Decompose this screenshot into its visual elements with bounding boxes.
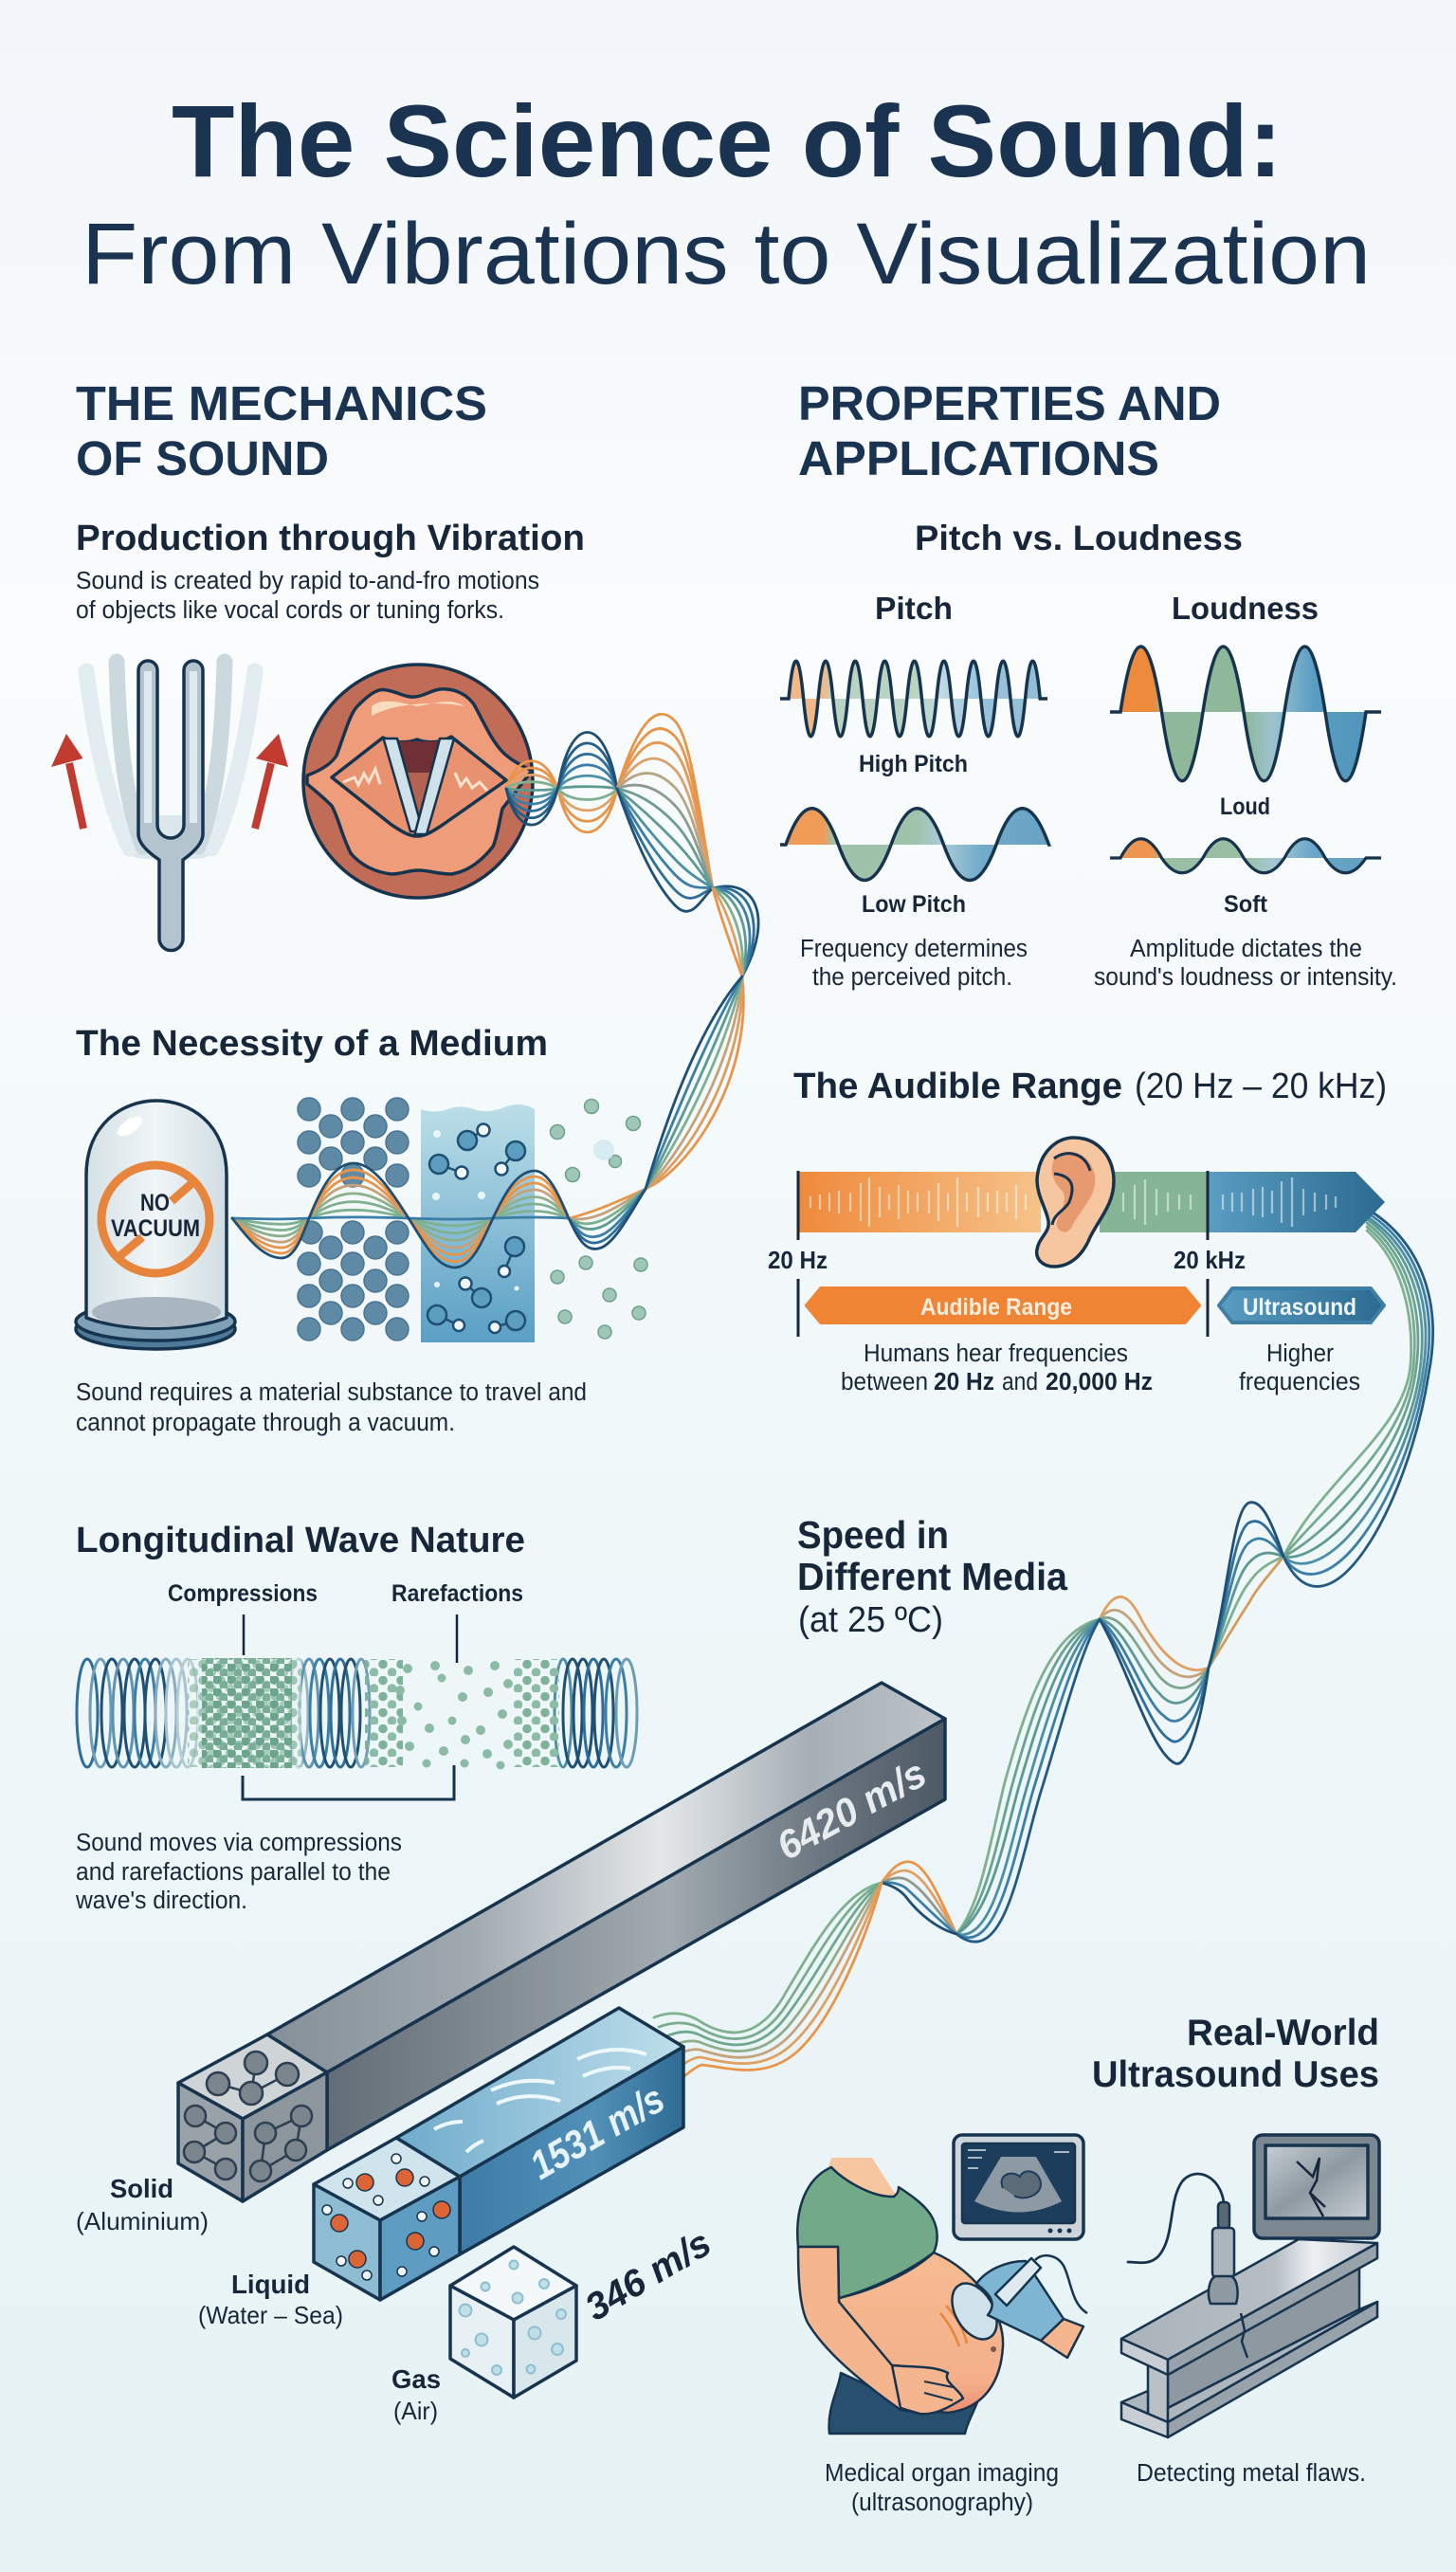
label: gas bbox=[391, 2364, 441, 2425]
label: soft: Soft bbox=[1224, 891, 1268, 918]
label: solid bbox=[76, 2174, 209, 2235]
chart: low pitch wave bbox=[780, 809, 1048, 880]
text: human hearing range bbox=[841, 1341, 1153, 1395]
heading: the audible range: The Audible Range bbox=[793, 1067, 1122, 1106]
text: longitudinal description bbox=[75, 1830, 402, 1914]
bar: solid aluminium bbox=[178, 1683, 945, 2201]
label: gas: (Air) bbox=[393, 2397, 438, 2425]
chart: high pitch wave bbox=[780, 661, 1047, 737]
text: higher frequencies: Higher bbox=[1266, 1341, 1334, 1367]
wave: through media rising to the junction bbox=[232, 976, 743, 1268]
heading: pitch vs loudness: Pitch vs. Loudness bbox=[915, 519, 1243, 557]
bar: liquid sea water: 1531 m/s bbox=[522, 2076, 672, 2188]
label: rarefactions bbox=[391, 1580, 523, 1663]
pill: ultrasound: Ultrasound bbox=[1243, 1294, 1356, 1321]
panel: solid particles bbox=[298, 1098, 409, 1341]
pill: audible range: Audible Range bbox=[920, 1294, 1072, 1321]
label: liquid bbox=[198, 2270, 343, 2329]
chart: soft wave bbox=[1110, 839, 1381, 873]
caption: medical organ imaging: Medical organ imaging bbox=[825, 2460, 1059, 2487]
caption: medical organ imaging bbox=[825, 2460, 1059, 2516]
cube: gas air bbox=[450, 2247, 576, 2398]
text: production description: of objects like vocal cords or tuning forks. bbox=[76, 597, 504, 624]
wave: from vocal cords down to the junction bbox=[506, 661, 758, 976]
text: amplitude dictates loudness: Amplitude dictates the bbox=[1130, 936, 1362, 962]
heading: pitch: Pitch bbox=[875, 591, 953, 626]
icon: vacuum bell jar bbox=[76, 1101, 235, 1349]
heading: the necessity of a medium: The Necessity of a Medium bbox=[76, 1024, 548, 1064]
pill: ultrasound bbox=[1219, 1288, 1384, 1322]
chart: longitudinal spring with particles bbox=[77, 1658, 637, 1769]
heading: loudness: Loudness bbox=[1172, 591, 1319, 626]
bracket: wavelength marker bbox=[243, 1765, 454, 1799]
label: gas: Gas bbox=[391, 2364, 441, 2394]
heading: speed in different media: Different Media bbox=[797, 1555, 1068, 1598]
heading: speed in different media: (at 25 ºC) bbox=[798, 1600, 943, 1640]
text: amplitude dictates loudness bbox=[1094, 936, 1397, 991]
label: low pitch: Low Pitch bbox=[862, 891, 966, 918]
heading: production through vibration: Production through Vibration bbox=[76, 519, 585, 558]
text: human hearing range: 20 Hz bbox=[934, 1369, 994, 1395]
icon: tuning fork bbox=[86, 661, 255, 950]
icon: ear bbox=[1037, 1138, 1114, 1267]
heading: real-world ultrasound uses bbox=[1092, 2013, 1379, 2095]
markers: range boundaries bbox=[798, 1279, 1208, 1337]
icon: vacuum bell jar: NO bbox=[140, 1190, 170, 1216]
label: solid: (Aluminium) bbox=[76, 2207, 209, 2235]
heading: the audible range: (20 Hz – 20 kHz) bbox=[1135, 1067, 1387, 1106]
heading: longitudinal wave nature: Longitudinal Wave Nature bbox=[76, 1521, 525, 1560]
bar: solid aluminium: 6420 m/s bbox=[770, 1750, 934, 1869]
heading: properties and applications bbox=[798, 376, 1221, 485]
label: rarefactions: Rarefactions bbox=[391, 1580, 523, 1607]
heading: speed in different media bbox=[797, 1513, 1068, 1640]
text: higher frequencies: frequencies bbox=[1239, 1369, 1360, 1395]
arrow: right vibration bbox=[255, 734, 288, 829]
icon: vacuum bell jar: VACUUM bbox=[111, 1215, 200, 1242]
text: longitudinal description: Sound moves via compressions bbox=[76, 1830, 402, 1856]
text: human hearing range: Humans hear frequencies bbox=[864, 1341, 1128, 1367]
heading: the mechanics of sound: OF SOUND bbox=[76, 431, 329, 485]
label: 20 Hz: 20 Hz bbox=[768, 1246, 828, 1274]
panel: liquid with molecules bbox=[421, 1104, 535, 1342]
illustration: pregnant patient with ultrasound probe bbox=[797, 2158, 1087, 2434]
chart: audible spectrum bar bbox=[798, 1171, 1385, 1240]
text: amplitude dictates loudness: sound's loudness or intensity. bbox=[1094, 964, 1397, 991]
label: compressions: Compressions bbox=[168, 1580, 318, 1607]
title bbox=[82, 83, 1371, 302]
icon: flaw detection monitor bbox=[1254, 2135, 1379, 2238]
heading: the mechanics of sound: THE MECHANICS bbox=[76, 376, 487, 430]
icon: medical ultrasound monitor bbox=[954, 2135, 1083, 2239]
text: production description: Sound is created by rapid to-and-fro motions bbox=[76, 568, 539, 594]
caption: detecting metal flaws: Detecting metal flaws. bbox=[1137, 2460, 1366, 2487]
icon: vocal cords in throat bbox=[303, 665, 533, 898]
text: medium description bbox=[76, 1379, 587, 1436]
text: human hearing range: and bbox=[1002, 1369, 1038, 1395]
text: frequency determines pitch bbox=[800, 936, 1028, 991]
label: 346 m/s: 346 m/s bbox=[578, 2222, 719, 2329]
heading: speed in different media: Speed in bbox=[797, 1513, 949, 1557]
heading: real-world ultrasound uses: Ultrasound Uses bbox=[1092, 2054, 1379, 2095]
bar: liquid sea water bbox=[314, 2008, 683, 2300]
label: high pitch: High Pitch bbox=[859, 751, 968, 777]
heading: the mechanics of sound bbox=[76, 376, 487, 485]
panel: gas particles bbox=[550, 1100, 647, 1339]
label: loud: Loud bbox=[1220, 793, 1270, 820]
wave: from ultrasound arrow to the speed bars bbox=[654, 1209, 1433, 2076]
text: human hearing range: 20,000 Hz bbox=[1046, 1369, 1153, 1395]
heading: properties and applications: APPLICATIONS bbox=[798, 431, 1159, 485]
pill: audible range bbox=[807, 1288, 1199, 1322]
text: medium description: cannot propagate through a vacuum. bbox=[76, 1410, 455, 1436]
label: liquid: (Water – Sea) bbox=[198, 2301, 343, 2329]
text: production description bbox=[76, 568, 539, 624]
heading: properties and applications: PROPERTIES AND bbox=[798, 376, 1221, 430]
icon: flaw detection probe and cable bbox=[1128, 2174, 1238, 2304]
text: medium description: Sound requires a material substance to travel and bbox=[76, 1379, 587, 1406]
heading: real-world ultrasound uses: Real-World bbox=[1187, 2013, 1379, 2053]
text: longitudinal description: wave's direction. bbox=[75, 1888, 247, 1914]
text: frequency determines pitch: Frequency determines bbox=[800, 936, 1028, 962]
illustration: metal flaw detection beam bbox=[1121, 2239, 1377, 2437]
caption: medical organ imaging: (ultrasonography) bbox=[851, 2490, 1033, 2516]
title: The Science of Sound: bbox=[172, 83, 1283, 198]
text: human hearing range: between bbox=[841, 1369, 928, 1395]
label: solid: Solid bbox=[110, 2174, 173, 2203]
text: longitudinal description: and rarefactions parallel to the bbox=[76, 1859, 391, 1886]
arrow: left vibration bbox=[51, 734, 83, 829]
text: frequency determines pitch: the perceived pitch. bbox=[812, 964, 1012, 991]
label: liquid: Liquid bbox=[231, 2270, 310, 2299]
heading: the audible range bbox=[793, 1067, 1387, 1106]
chart: loud wave bbox=[1110, 647, 1381, 781]
label: 20 kHz: 20 kHz bbox=[1174, 1246, 1246, 1274]
title: From Vibrations to Visualization bbox=[82, 206, 1371, 302]
text: higher frequencies bbox=[1239, 1341, 1360, 1395]
